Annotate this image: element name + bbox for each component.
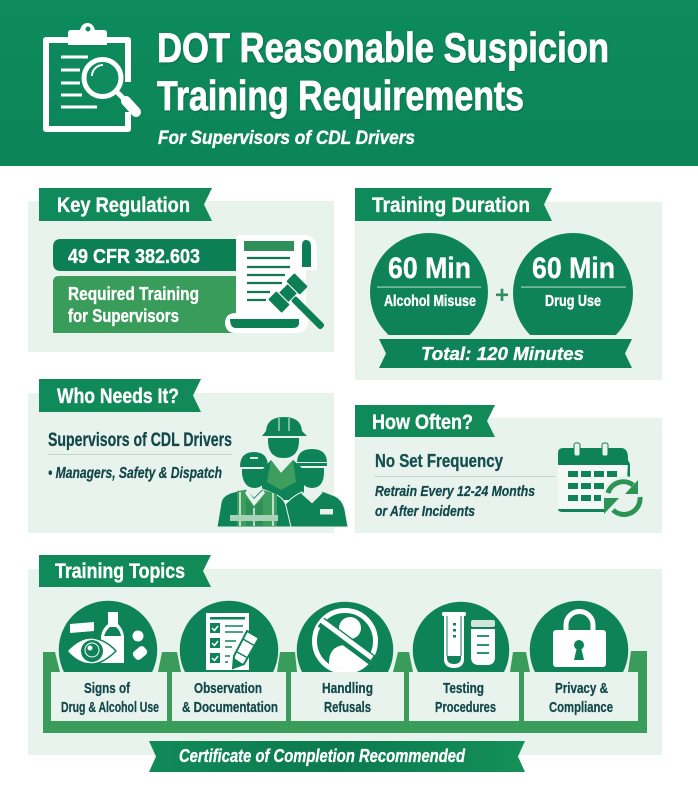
heading ribbon: how often: How Often? bbox=[372, 411, 473, 434]
topics frame bbox=[43, 651, 647, 733]
text: retrain interval: Retrain Every 12-24 Months bbox=[375, 483, 535, 500]
circle: drug use 60 min: Drug Use bbox=[545, 293, 601, 310]
topic: signs of drug and alcohol use bbox=[51, 600, 167, 721]
regulation number bar bbox=[53, 239, 238, 271]
title bbox=[157, 24, 609, 119]
plus sign: + bbox=[495, 282, 509, 309]
topic: testing procedures bbox=[409, 601, 519, 721]
total ribbon bbox=[379, 339, 632, 368]
panel: key regulation bbox=[28, 188, 336, 352]
topic: signs of drug and alcohol use: Signs of bbox=[84, 680, 131, 697]
text: managers safety dispatch: • Managers, Safety & Dispatch bbox=[48, 465, 222, 482]
topic: privacy and compliance: Privacy & bbox=[555, 680, 608, 697]
topic: observation and documentation: Observation bbox=[194, 680, 262, 697]
icon: test tube and jar bbox=[442, 612, 495, 668]
topic: testing procedures: Testing bbox=[443, 680, 484, 697]
required training bar: for Supervisors bbox=[68, 306, 179, 326]
required training bar bbox=[53, 276, 238, 333]
heading ribbon: how often bbox=[355, 405, 495, 437]
icon: calendar with refresh bbox=[558, 443, 645, 518]
heading ribbon: training topics bbox=[39, 555, 211, 587]
topic: testing procedures: Procedures bbox=[435, 699, 496, 716]
icon: document and gavel bbox=[225, 235, 336, 341]
heading ribbon: key regulation: Key Regulation bbox=[57, 194, 190, 217]
panel: who needs it bbox=[28, 379, 348, 533]
regulation number bar: 49 CFR 382.603 bbox=[68, 246, 200, 268]
panel: how often bbox=[355, 405, 662, 533]
heading ribbon: training duration: Training Duration bbox=[372, 194, 530, 217]
circle: alcohol misuse 60 min: 60 Min bbox=[388, 252, 471, 285]
heading ribbon: who needs it bbox=[39, 379, 201, 412]
total ribbon: Total: 120 Minutes bbox=[421, 344, 584, 364]
heading ribbon: training topics: Training Topics bbox=[55, 560, 185, 583]
topic: observation and documentation: & Documentation bbox=[182, 699, 278, 716]
circle: drug use 60 min: 60 Min bbox=[532, 252, 615, 285]
icon: padlock bbox=[553, 612, 606, 667]
subtitle: For Supervisors of CDL Drivers bbox=[158, 128, 415, 149]
circle: alcohol misuse 60 min bbox=[370, 233, 488, 335]
icon: three workers bbox=[217, 417, 348, 527]
panel: training duration bbox=[355, 188, 662, 380]
circle: drug use 60 min bbox=[513, 233, 633, 335]
topic: signs of drug and alcohol use: Drug & Alcohol Use bbox=[61, 699, 159, 716]
title: DOT Reasonable Suspicion bbox=[157, 24, 609, 71]
topic: privacy and compliance: Compliance bbox=[549, 699, 613, 716]
certificate ribbon bbox=[149, 741, 525, 772]
topic: handling refusals: Handling bbox=[322, 680, 373, 697]
certificate ribbon: Certificate of Completion Recommended bbox=[179, 746, 466, 766]
title: Training Requirements bbox=[157, 72, 524, 119]
topic: observation and documentation bbox=[172, 600, 286, 721]
topic: handling refusals bbox=[291, 601, 404, 721]
topic: privacy and compliance bbox=[524, 600, 638, 721]
panel: training topics bbox=[28, 555, 662, 755]
topic: handling refusals: Refusals bbox=[324, 699, 371, 716]
text: no set frequency: No Set Frequency bbox=[375, 451, 503, 471]
text: supervisors of CDL drivers: Supervisors of CDL Drivers bbox=[48, 430, 232, 451]
circle: alcohol misuse 60 min: Alcohol Misuse bbox=[384, 293, 476, 310]
icon: checklist and pencil bbox=[206, 613, 259, 670]
text: retrain interval bbox=[375, 483, 535, 520]
heading ribbon: training duration bbox=[355, 188, 552, 221]
required training bar: Required Training bbox=[68, 284, 199, 304]
text: retrain interval: or After Incidents bbox=[375, 503, 475, 520]
icon: eye bottle pills bbox=[67, 612, 149, 664]
heading ribbon: who needs it: Who Needs It? bbox=[57, 385, 179, 408]
icon: clipboard with magnifier bbox=[46, 23, 136, 129]
header banner bbox=[0, 0, 698, 166]
heading ribbon: key regulation bbox=[39, 188, 212, 221]
icon: prohibited person bbox=[314, 610, 376, 672]
